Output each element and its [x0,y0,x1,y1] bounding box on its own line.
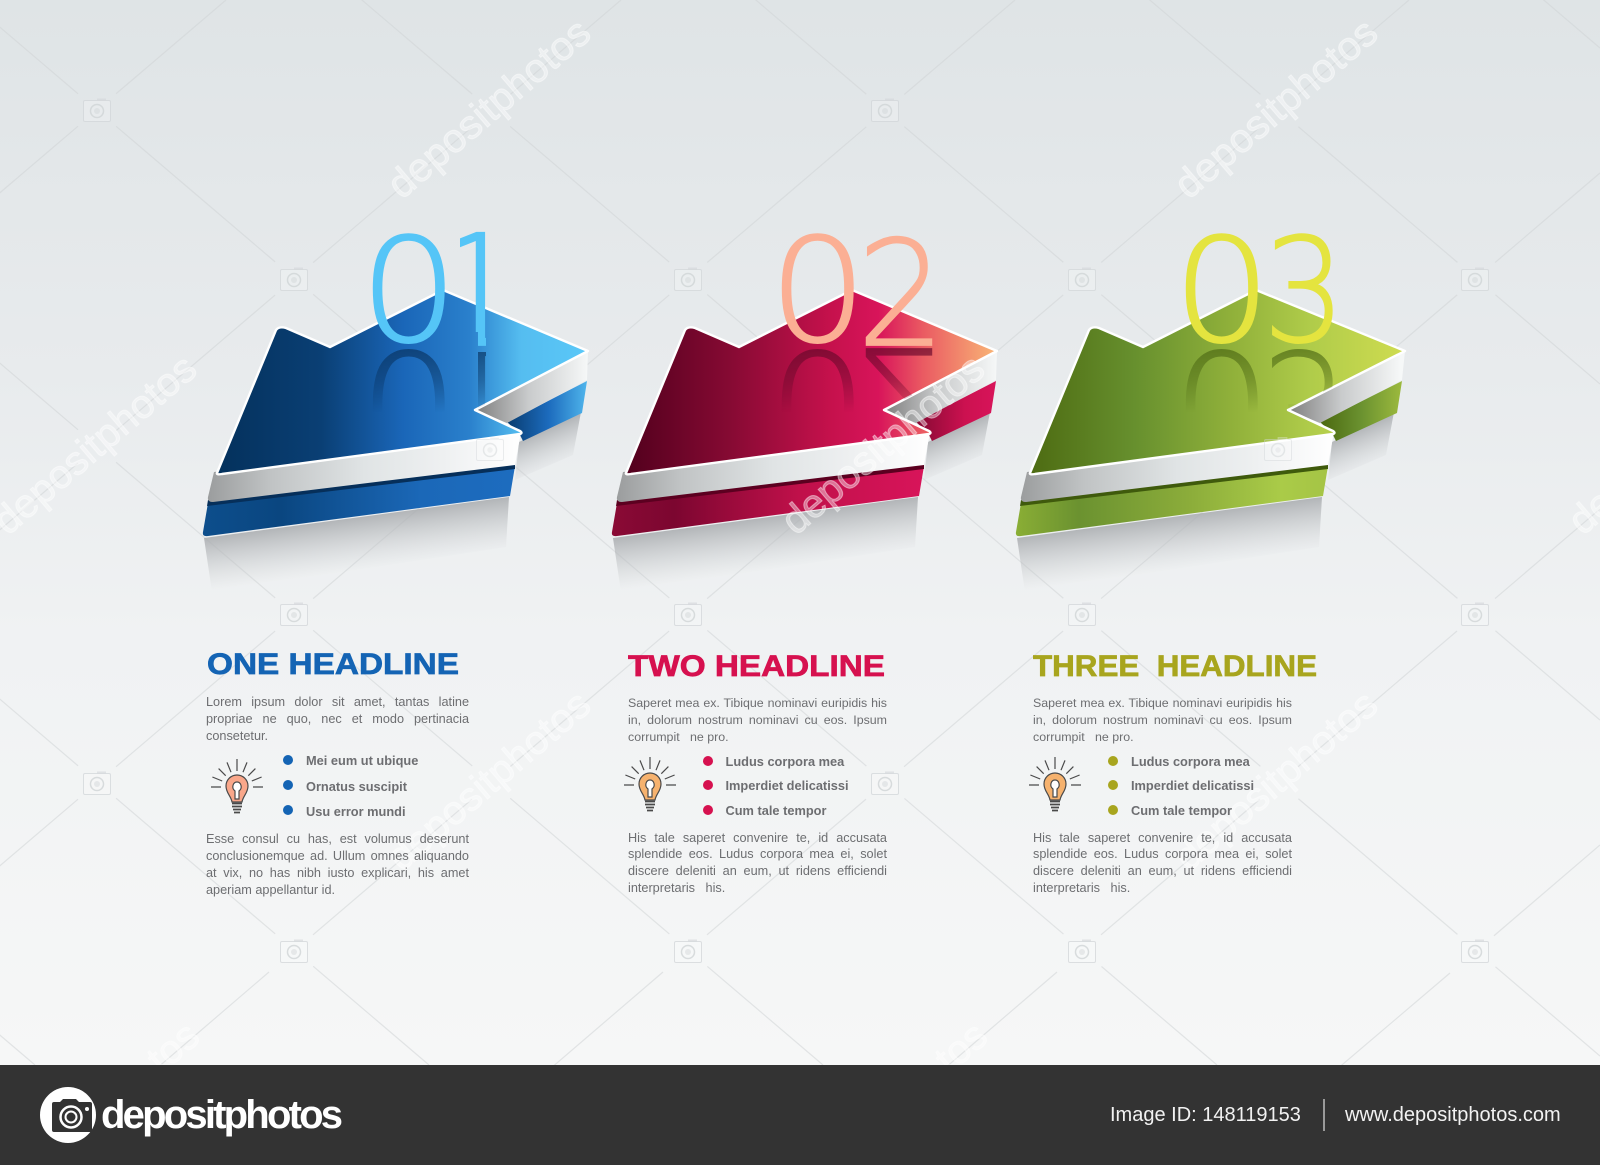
icon: light bulb [624,757,676,812]
number 03 [1173,209,1345,376]
text block: details: His tale saperet convenire te, id accusata [1033,830,1292,844]
logo wordmark: depositphotos [101,1093,343,1137]
number 02: 0 [769,209,867,376]
watermarks: depositphotos [1166,10,1386,207]
text block: details [206,832,469,896]
number 02: 2 [857,210,945,380]
number reflection 01 [373,349,486,408]
number reflection 03 [1186,349,1333,410]
number 01: 0 [360,209,458,376]
bullet list: Ludus corpora mea [1131,754,1250,769]
text block: intro: Saperet mea ex. Tibique nominavi euripidis his [628,696,887,710]
website url: www.depositphotos.com [1345,1104,1561,1126]
bullet list [1108,754,1254,818]
watermarks: depositphotos [1166,682,1386,879]
bullet list: Cum tale tempor [1131,803,1232,818]
number 01: 1 [429,203,527,382]
text block: intro: propriae ne quo, nec et modo pertinacia [206,712,469,726]
icon: camera logo [40,1087,96,1143]
text block: intro: in, dolorum nostrum nominavi cu eos. Ipsum [1033,712,1292,726]
number reflection 01: 0 [360,317,458,484]
bullet list: Imperdiet delicatissi [1131,778,1254,793]
number 01 [372,232,486,346]
number reflection 02: 0 [769,317,867,484]
watermarks: depositphotos [379,682,599,879]
divider [1323,1099,1325,1131]
bullet list: Ornatus suscipit [306,779,407,794]
arrow 02 red [612,209,997,592]
panel: column three [1029,650,1317,895]
bullet list: Usu error mundi [306,804,406,819]
text block: intro: Saperet mea ex. Tibique nominavi euripidis his [1033,696,1292,710]
bullet list: Ludus corpora mea [726,754,844,769]
panel: column one [206,648,470,896]
text block: details [628,830,887,895]
text block: details: interpretaris his. [1033,881,1130,895]
text block: intro: Lorem ipsum dolor sit amet, tantas latine [206,694,469,708]
bullet list: Mei eum ut ubique [306,753,418,768]
text block: details: Esse consul cu has, est volumus deserunt [206,832,469,846]
number reflection 02: 2 [857,314,945,484]
number 02 [769,209,945,380]
panel: column two [624,650,887,895]
footer bar [0,1065,1600,1165]
text block: details: aperiam appellantur id. [206,882,335,896]
bullet list [283,753,418,819]
arrow 03 green [1016,209,1405,592]
number reflection 01: 1 [429,312,527,491]
text block: intro: corrumpit ne pro. [1033,730,1134,744]
number 03: 3 [1263,209,1345,376]
watermarks: depositphotos [379,10,599,207]
text block: intro: in, dolorum nostrum nominavi cu eos. Ipsum [628,712,887,726]
watermarks: depositphotos [773,346,993,543]
text block: details: discere deleniti an eum, ut ridens efficiendi [1033,864,1292,878]
bullet list: Imperdiet delicatissi [726,778,849,793]
text block: intro: corrumpit ne pro. [628,730,729,744]
text block: details: conclusionemque ad. Ullum omnes aliquando [206,848,469,862]
text block: details: splendide eos. Ludus corpora mea ei, solet [628,847,887,861]
bullet list [703,754,849,818]
text block: intro [206,694,470,742]
text block: intro: consetetur. [206,728,268,742]
text block: details: at vix, no has nibh iusto explicari, his amet [206,866,469,880]
text block: details [1033,830,1292,895]
icon: light bulb [211,759,263,814]
icon: light bulb [1029,757,1081,812]
arrow 01 blue [202,232,589,579]
number reflection 02 [782,348,932,406]
text block: intro [1033,696,1292,744]
text block: details: interpretaris his. [628,881,725,895]
bullet list: Cum tale tempor [726,803,826,818]
text block: intro [628,696,887,744]
number 03: 0 [1173,209,1271,376]
text block: details: discere deleniti an eum, ut ridens efficiendi [628,864,887,878]
text block: details: splendide eos. Ludus corpora mea ei, solet [1033,847,1292,861]
text block: details: His tale saperet convenire te, id accusata [628,830,887,844]
number reflection 03: 0 [1173,317,1271,484]
number reflection 03: 3 [1263,317,1345,484]
image id: Image ID: 148119153 [1110,1104,1301,1126]
